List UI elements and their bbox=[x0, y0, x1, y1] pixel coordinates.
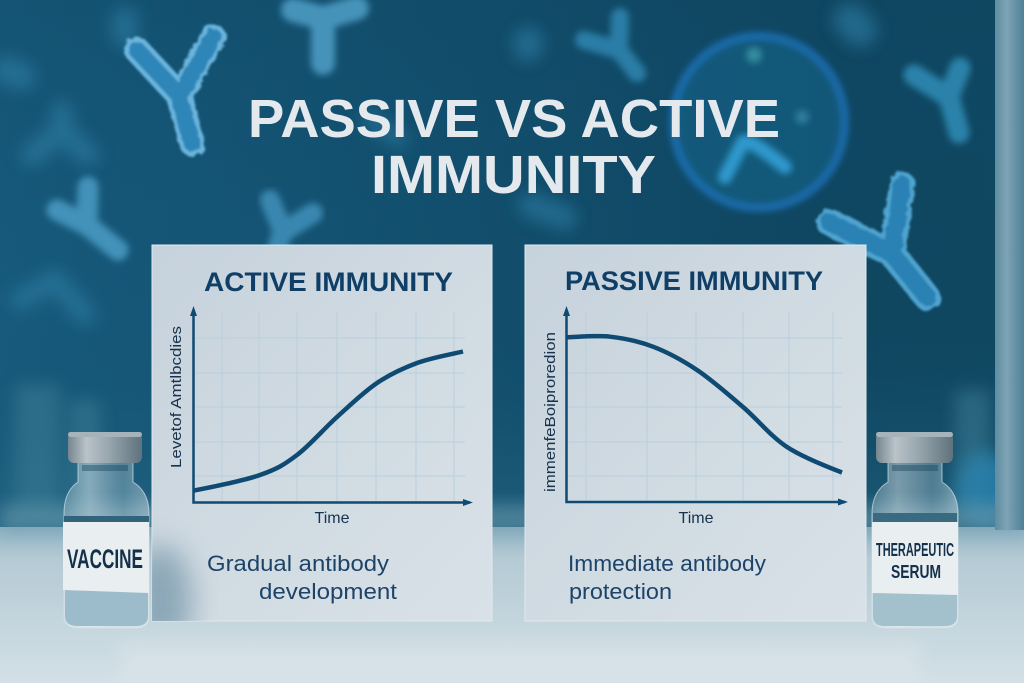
line chart: passive protection over time: Time bbox=[679, 510, 714, 527]
label: therapeutic serum: THERAPEUTIC bbox=[876, 540, 954, 560]
cell: translucent blue sphere bbox=[673, 36, 845, 208]
caption: immediate antibody protection: Immediate antibody bbox=[568, 551, 766, 576]
line chart: passive protection over time bbox=[542, 306, 848, 527]
caption: gradual antibody development bbox=[207, 551, 397, 604]
line chart: passive protection over time: immenfeBoiproredion bbox=[542, 332, 559, 492]
caption: immediate antibody protection: protection bbox=[569, 579, 672, 604]
line chart: active antibody level over time: Levetof Amtlbcdies bbox=[168, 326, 185, 468]
antibody: mid left bbox=[270, 200, 313, 245]
antibody: lower left bbox=[57, 187, 118, 250]
title: IMMUNITY bbox=[371, 145, 656, 205]
label: vaccine bbox=[63, 522, 149, 593]
vial: vaccine bbox=[63, 432, 149, 628]
vial: therapeutic serum bbox=[872, 432, 958, 628]
panel: passive immunity bbox=[525, 245, 866, 621]
line chart: active antibody level over time bbox=[168, 306, 473, 527]
title bbox=[248, 89, 780, 205]
antibody: large top-left bbox=[137, 37, 213, 143]
heading: passive immunity: PASSIVE IMMUNITY bbox=[565, 266, 823, 296]
faint background antibodies bbox=[5, 20, 860, 315]
label: therapeutic serum: SERUM bbox=[891, 562, 941, 582]
caption: gradual antibody development: Gradual antibody bbox=[207, 551, 389, 576]
heading: active immunity: ACTIVE IMMUNITY bbox=[204, 267, 453, 297]
antibody: far right bbox=[914, 68, 960, 133]
panel: active immunity bbox=[152, 244, 492, 622]
label: therapeutic serum bbox=[872, 522, 958, 595]
line chart: active antibody level over time: Time bbox=[315, 510, 350, 527]
caption: gradual antibody development: development bbox=[259, 579, 397, 604]
label: vaccine: VACCINE bbox=[67, 544, 143, 574]
title: PASSIVE VS ACTIVE bbox=[248, 89, 780, 149]
antibody: top centre bbox=[293, 8, 357, 63]
antibody: large right, behind passive card bbox=[829, 185, 927, 297]
caption: immediate antibody protection bbox=[568, 551, 766, 604]
antibody: top right blurred bbox=[584, 17, 637, 73]
